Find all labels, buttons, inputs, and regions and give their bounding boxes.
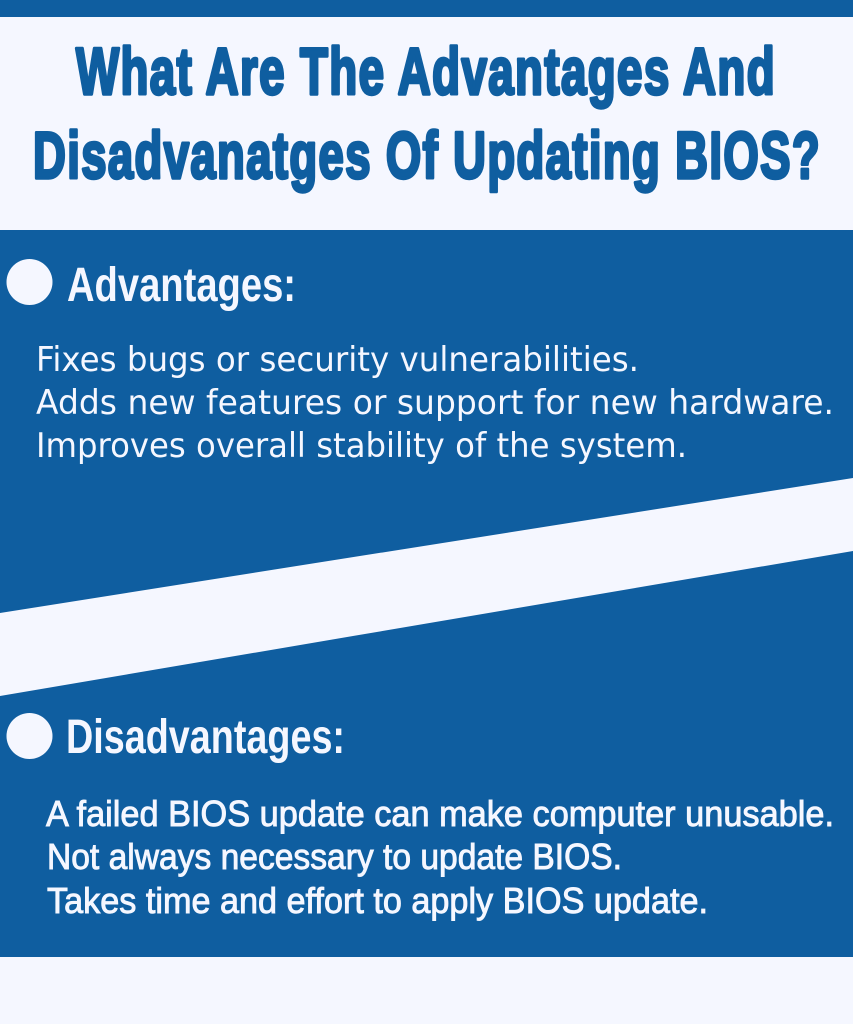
text block: advantages list [36,340,834,466]
text block: disadvantages list: Takes time and effort to apply BIOS update. [47,880,708,921]
top blue band [0,0,853,17]
panel: advantages [6,259,834,466]
icon: advantages bullet [6,259,52,305]
heading: advantages: Advantages: [67,259,296,312]
text block: disadvantages list [46,793,834,921]
main blue panel [0,230,853,957]
title [33,34,821,192]
heading: disadvantages: Disadvantages: [66,711,345,764]
diagonal white stripe [0,478,853,696]
text block: advantages list: Adds new features or support for new hardware. [36,383,834,423]
text block: disadvantages list: Not always necessary to update BIOS. [47,836,622,877]
text block: advantages list: Improves overall stability of the system. [36,426,687,466]
panel: disadvantages [6,711,834,921]
text block: disadvantages list: A failed BIOS update can make computer unusable. [46,793,834,834]
icon: disadvantages bullet [6,713,52,759]
text block: advantages list: Fixes bugs or security vulnerabilities. [36,340,639,380]
